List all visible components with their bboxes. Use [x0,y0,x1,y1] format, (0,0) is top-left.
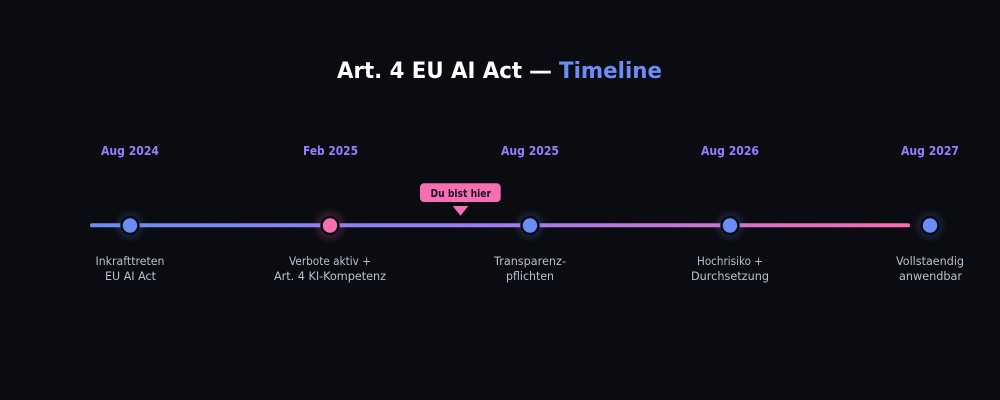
title [337,58,662,84]
description: Hochrisiko: Hochrisiko + [697,255,763,268]
milestone: Aug 2025 [493,143,566,283]
callout: Du bist hier [420,183,501,216]
description: Vollstaendig anwendbar: Vollstaendig [896,255,964,268]
title: Timeline [559,58,662,84]
marker: Feb 2025 [312,208,348,244]
date label: Feb 2025: Feb 2025 [303,143,358,158]
marker: Aug 2024 [113,208,147,242]
milestone: Aug 2026 [691,143,769,283]
date label: Aug 2026: Aug 2026 [701,143,759,158]
description: Hochrisiko [691,255,769,283]
title: — [529,58,552,84]
timeline line [90,223,910,227]
marker: Aug 2025 [513,208,547,242]
callout: Du bist hier: Du bist hier [430,189,491,200]
description: Inkrafttreten: EU AI Act [105,270,157,283]
description: Vollstaendig anwendbar: anwendbar [899,270,962,283]
description: Transparenzpflichten [493,255,566,283]
milestone: Aug 2027 [896,143,964,283]
date label: Aug 2024: Aug 2024 [101,143,159,158]
description: Transparenzpflichten: pflichten [506,270,554,283]
description: Verbote aktiv: Art. 4 KI-Kompetenz [274,270,386,283]
description: Verbote aktiv [274,255,386,283]
marker: Aug 2026 [713,208,747,242]
description: Inkrafttreten: Inkrafttreten [96,255,164,268]
description: Verbote aktiv: Verbote aktiv + [289,255,371,268]
description: Vollstaendig anwendbar [896,255,964,283]
title: Art. 4 EU AI Act [337,58,522,84]
arrow: callout pointer [453,206,468,216]
description: Inkrafttreten [96,255,164,283]
date label: Aug 2027: Aug 2027 [901,143,959,158]
date label: Aug 2025: Aug 2025 [501,143,559,158]
marker: Aug 2027 [913,208,947,242]
description: Hochrisiko: Durchsetzung [691,270,769,283]
milestone: Feb 2025 [274,143,386,283]
description: Transparenzpflichten: Transparenz- [493,255,566,268]
milestone: Aug 2024 [96,143,164,283]
